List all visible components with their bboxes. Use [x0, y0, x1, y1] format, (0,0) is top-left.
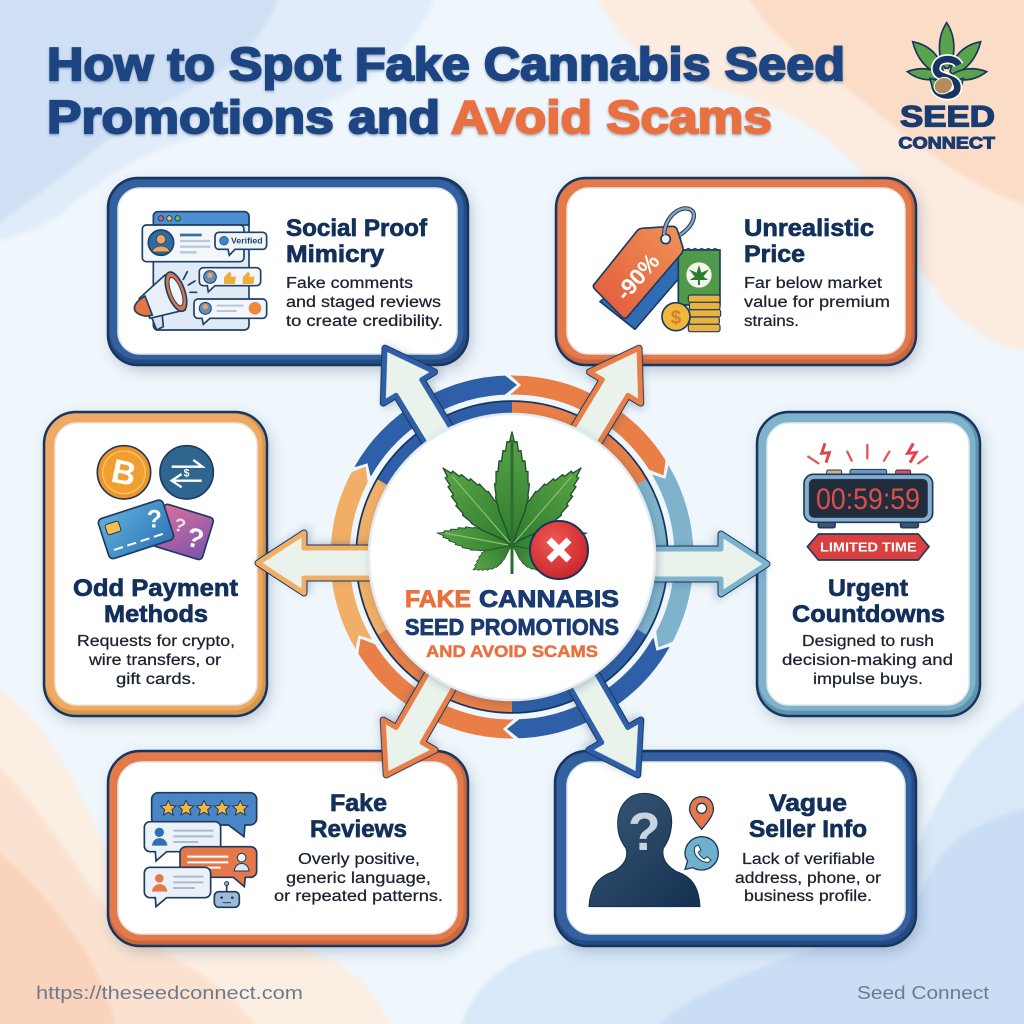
heading — [73, 575, 238, 628]
central ring — [340, 374, 684, 740]
logo: Seed Connect: SEED — [900, 101, 995, 134]
description: or repeated patterns. — [274, 888, 443, 905]
heading — [310, 790, 407, 843]
footer url: https://theseedconnect.com — [36, 983, 303, 1003]
center text: CANNABIS — [479, 586, 619, 613]
arrow: to Fake Reviews — [360, 569, 522, 790]
description: strains. — [744, 313, 799, 330]
panel: Urgent Countdowns — [757, 412, 980, 716]
icon: crypto coins and gift cards: B — [108, 453, 139, 494]
icon: crypto coins and gift cards: $ — [184, 468, 190, 480]
icon: unknown seller silhouette, pin and phone: ? — [628, 803, 661, 862]
center text: AND AVOID SCAMS — [426, 643, 598, 661]
description: Designed to rush — [802, 633, 934, 650]
footer brand: Seed Connect — [857, 983, 989, 1003]
title: Promotions and — [47, 91, 440, 143]
heading: Unrealistic — [744, 215, 874, 242]
icon: digital countdown clock: LIMITED TIME — [820, 541, 917, 555]
description — [77, 633, 235, 688]
description: wire transfers, or — [88, 652, 221, 669]
logo: Seed Connect — [898, 23, 995, 152]
center text — [405, 586, 619, 661]
panel: Unrealistic Price — [556, 178, 916, 365]
heading: Mimicry — [286, 241, 385, 268]
panel: Fake Reviews — [108, 751, 468, 946]
icon: unknown seller silhouette, pin and phone — [589, 793, 718, 907]
icon: digital countdown clock: 00:59:59 — [816, 483, 920, 516]
description: Lack of verifiable — [742, 851, 875, 868]
heading: Social Proof — [286, 215, 428, 242]
icon: price tag, seed pack and coins: $ — [671, 306, 682, 327]
description: and staged reviews — [286, 294, 441, 311]
description: decision-making and — [782, 652, 953, 669]
icon: crypto coins and gift cards: ? — [183, 521, 207, 555]
central circle — [369, 414, 655, 700]
heading: Price — [744, 241, 805, 268]
icon: crypto coins and gift cards: ? — [147, 506, 162, 533]
heading: Urgent — [828, 575, 908, 602]
description: Requests for crypto, — [77, 633, 235, 650]
heading: Odd Payment — [73, 575, 238, 602]
description: Far below market — [744, 275, 883, 292]
icon: browser, megaphone and chat bubbles — [134, 212, 267, 330]
description: value for premium — [744, 294, 890, 311]
heading — [744, 215, 874, 268]
title: Avoid Scams — [451, 91, 772, 143]
arrow: to Urgent Countdowns — [547, 534, 767, 594]
heading: Vague — [769, 790, 847, 817]
icon: cannabis leaf with red X — [430, 432, 594, 579]
description: impulse buys. — [813, 671, 923, 688]
description: generic language, — [286, 870, 431, 887]
arrow: to Vague Seller Info — [502, 569, 664, 790]
description: gift cards. — [116, 671, 196, 688]
heading — [749, 790, 867, 843]
logo: Seed Connect: CONNECT — [898, 133, 995, 152]
description — [744, 275, 890, 330]
center text: SEED PROMOTIONS — [405, 614, 619, 640]
panel: Social Proof Mimicry — [108, 178, 468, 365]
icon: browser, megaphone and chat bubbles: Verified — [231, 236, 263, 246]
icon: price tag, seed pack and coins: -90% — [610, 248, 664, 305]
description — [782, 633, 953, 688]
panel: Odd Payment Methods — [44, 412, 267, 716]
panel: Vague Seller Info — [555, 751, 916, 946]
title: How to Spot Fake Cannabis Seed — [47, 38, 845, 90]
icon: crypto coins and gift cards: ? — [172, 514, 188, 537]
heading: Methods — [104, 601, 208, 628]
description: address, phone, or — [735, 870, 881, 887]
description: Fake comments — [286, 275, 413, 292]
heading — [286, 215, 428, 268]
description — [286, 275, 443, 330]
arrow: to Social Proof Mimicry — [359, 333, 525, 552]
heading: Fake — [330, 790, 387, 817]
center text: FAKE — [405, 586, 471, 613]
heading — [792, 575, 945, 628]
arrow: to Unrealistic Price — [499, 333, 665, 552]
description — [735, 851, 881, 905]
icon: price tag, seed pack and coins — [593, 208, 721, 332]
heading: Countdowns — [792, 601, 945, 628]
icon: digital countdown clock — [804, 443, 933, 560]
arrow: to Odd Payment Methods — [258, 533, 478, 593]
description — [274, 851, 443, 905]
icon: review chat bubbles and robot — [144, 793, 257, 907]
description: Overly positive, — [298, 851, 420, 868]
heading: Reviews — [310, 816, 407, 843]
description: to create credibility. — [286, 313, 443, 330]
description: business profile. — [744, 888, 872, 905]
title — [47, 38, 845, 143]
icon: crypto coins and gift cards — [97, 446, 214, 561]
heading: Seller Info — [749, 816, 867, 843]
